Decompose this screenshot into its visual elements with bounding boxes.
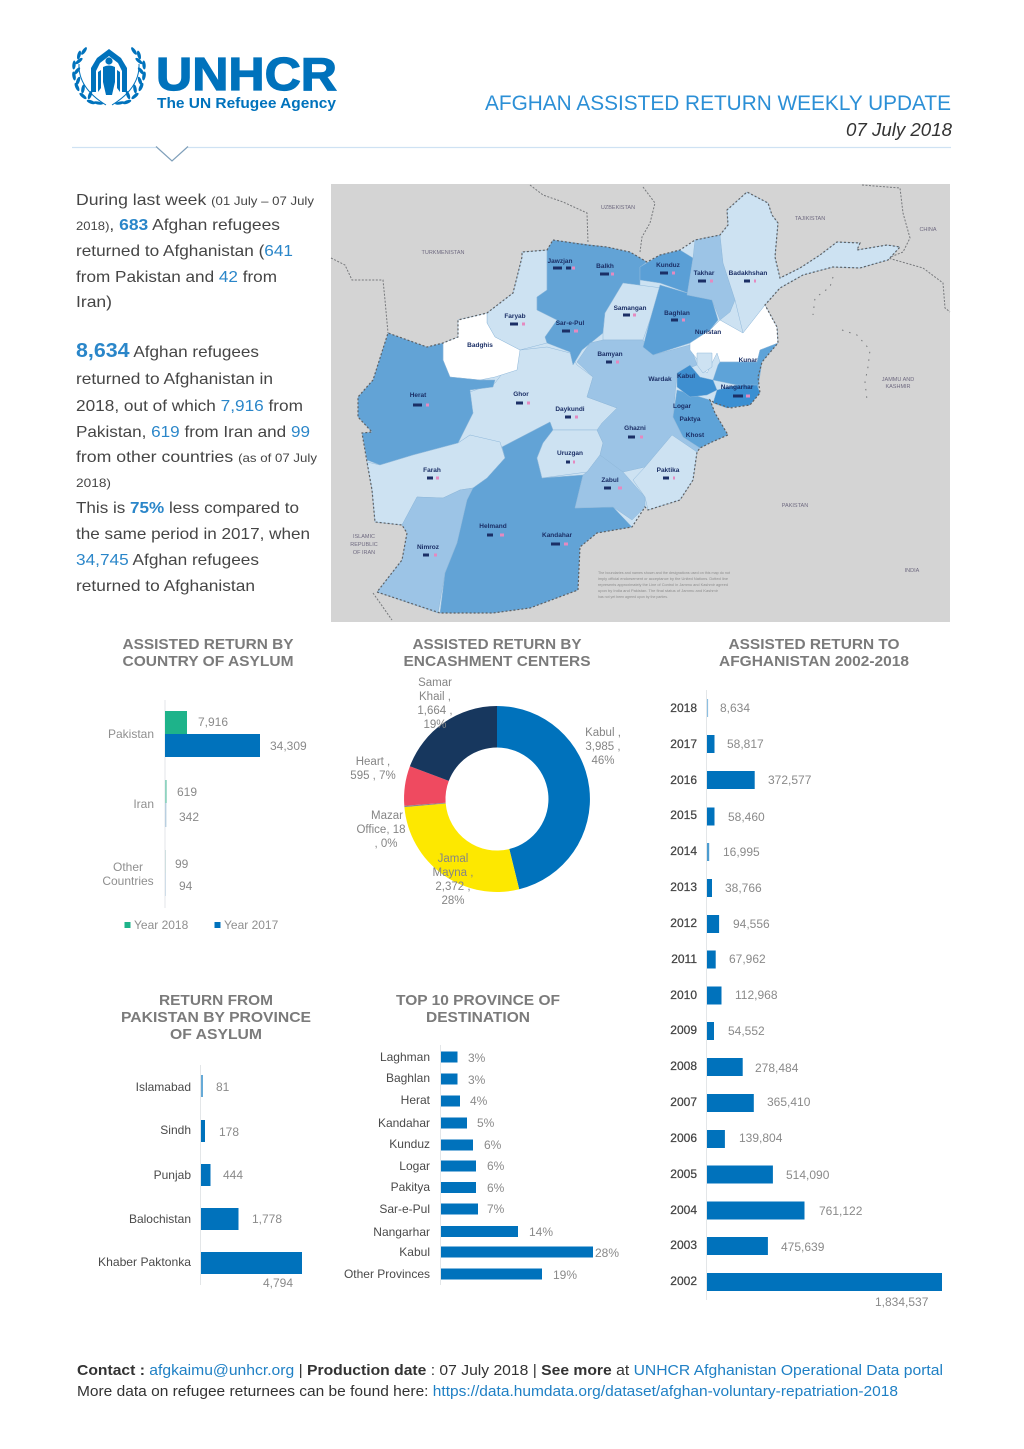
bar chart: 2016 (670, 773, 697, 787)
bar chart: 3% (468, 1073, 486, 1087)
bar chart: 619 (177, 785, 197, 799)
province labels: Kunduz (656, 262, 681, 269)
donut labels: Mayna , (433, 867, 473, 879)
neighbouring country labels: CHINA (919, 227, 937, 233)
text block: weekly summary: the same period in 2017, when (76, 526, 310, 543)
bar chart: 2012 (670, 916, 697, 930)
province labels: Zabul (601, 477, 619, 484)
province labels: Nangarhar (721, 384, 754, 391)
province labels: Kabul (677, 373, 695, 380)
heading: ASSISTED RETURN TO (728, 636, 900, 653)
neighbouring country labels: PAKISTAN (782, 503, 808, 509)
province labels: Takhar (694, 270, 715, 277)
bar chart: 58,817 (727, 737, 764, 751)
text block: weekly summary: returned to Afghanistan in (76, 371, 273, 388)
bar chart: 4,794 (263, 1276, 293, 1290)
bar chart: Pakistan (108, 727, 154, 741)
footer: contact and links: Contact : afgkaimu@unhcr.org | Production date : 07 July 2018 | See more at UNHCR Afghanistan Operational Data portal (77, 1362, 943, 1379)
province labels: Paktika (657, 467, 680, 474)
bar chart: 58,460 (728, 810, 765, 824)
bar chart: Khaber Paktonka (98, 1255, 191, 1269)
footer: contact and links: More data on refugee returnees can be found here: https://data.humdata.org/dataset/afghan-voluntary-repatriation-2018 (77, 1383, 898, 1400)
donut labels: 28% (441, 895, 465, 907)
panel: top 10 province of destination (344, 992, 619, 1285)
bar chart (670, 690, 942, 1309)
date: 07 July 2018 (846, 120, 952, 140)
heading: COUNTRY OF ASYLUM (122, 653, 294, 670)
bar chart: Countries (102, 874, 154, 888)
map disclaimer: represents approximately the Line of Control in Jammu and Kashmir agreed (598, 583, 728, 587)
province labels: Nimroz (417, 544, 440, 551)
legend: Year 2017 (224, 918, 279, 932)
text block: weekly summary: from other countries (as of 07 July (76, 449, 317, 466)
donut labels: Kabul , (585, 727, 621, 739)
bar chart: 14% (529, 1225, 553, 1239)
text block: weekly summary: returned to Afghanistan (76, 578, 255, 595)
province labels: Herat (410, 392, 427, 399)
bar chart: Balochistan (129, 1212, 191, 1226)
donut labels: 2,372 , (435, 881, 471, 893)
donut labels: Khail , (419, 691, 451, 703)
title: AFGHAN ASSISTED RETURN WEEKLY UPDATE (485, 92, 951, 115)
province labels: Khost (686, 432, 705, 439)
footer: contact and links (77, 1362, 943, 1400)
bar chart: 139,804 (739, 1131, 783, 1145)
neighbouring country labels: INDIA (905, 568, 920, 574)
bar chart: 2010 (670, 988, 697, 1002)
bar chart (344, 1045, 619, 1285)
bar chart: 94 (179, 879, 193, 893)
bar chart: 7% (487, 1202, 505, 1216)
heading: ASSISTED RETURN BY (412, 636, 582, 653)
text block: weekly summary: 2018), 683 Afghan refugees (76, 217, 280, 234)
donut labels: 595 , 7% (350, 770, 396, 782)
bar chart: 28% (595, 1246, 619, 1260)
bar chart: Other Provinces (344, 1267, 430, 1281)
bar chart: 2008 (670, 1059, 697, 1073)
heading (122, 636, 294, 670)
neighbouring country labels: TURKMENISTAN (422, 250, 465, 256)
text block: weekly summary: returned to Afghanistan ( 641 (76, 243, 293, 260)
bar chart: Iran (133, 797, 154, 811)
neighbouring country labels: JAMMU AND (882, 377, 914, 383)
heading: DESTINATION (426, 1009, 530, 1026)
donut labels: Mazar (371, 810, 403, 822)
neighbouring country labels: TAJIKISTAN (795, 216, 825, 222)
heading: PAKISTAN BY PROVINCE (121, 1009, 311, 1026)
bar chart: 2007 (670, 1095, 697, 1109)
donut labels: 1,664 , (417, 705, 453, 717)
bar chart: Punjab (154, 1168, 191, 1182)
bar chart: 2018 (670, 701, 697, 715)
text block: weekly summary: from Pakistan and 42 from (76, 269, 277, 286)
donut labels: 3,985 , (585, 741, 621, 753)
text block: weekly summary (76, 192, 317, 595)
province labels (410, 258, 767, 551)
province labels: Wardak (648, 376, 672, 383)
donut labels: 19% (423, 719, 447, 731)
bar chart: 2002 (670, 1274, 697, 1288)
bar chart: 475,639 (781, 1240, 825, 1254)
province labels: Helmand (479, 523, 507, 530)
province labels: Baghlan (664, 310, 690, 317)
bar chart: 6% (487, 1181, 505, 1195)
province labels: Sar-e-Pul (556, 320, 584, 327)
bar chart: 2004 (670, 1203, 697, 1217)
province labels: Badakhshan (729, 270, 767, 277)
bar chart: 1,778 (252, 1212, 282, 1226)
text block: weekly summary: During last week (01 July – 07 July (76, 192, 314, 209)
heading: TOP 10 PROVINCE OF (396, 992, 560, 1009)
bar chart: 2003 (670, 1238, 697, 1252)
map disclaimer: The boundaries and names shown and the designations used on this map do not (598, 571, 730, 575)
province labels: Samangan (614, 305, 646, 312)
bar chart: 2017 (670, 737, 697, 751)
bar chart: 38,766 (725, 881, 762, 895)
bar chart: Nangarhar (373, 1225, 430, 1239)
panel: assisted return to Afghanistan 2002-2018 (670, 636, 942, 1309)
bar chart: Pakitya (391, 1180, 430, 1194)
bar chart: 2014 (670, 844, 697, 858)
neighbouring country labels: OF IRAN (353, 550, 375, 556)
bar chart (98, 1065, 302, 1290)
donut labels: Jamal (438, 853, 468, 865)
bar chart: 5% (477, 1116, 495, 1130)
bar chart: 1,834,537 (875, 1295, 929, 1309)
panel: map of Afghanistan (331, 184, 950, 622)
bar chart: Kabul (399, 1245, 430, 1259)
map background (331, 184, 950, 622)
bar chart: 54,552 (728, 1024, 765, 1038)
bar chart: 342 (179, 810, 199, 824)
province labels: Nuristan (695, 329, 721, 336)
neighbouring country borders (331, 185, 950, 620)
donut labels: Samar (418, 677, 452, 689)
province labels: Badghis (467, 342, 493, 349)
bar chart: 8,634 (720, 701, 750, 715)
heading (121, 992, 311, 1043)
panel: return from Pakistan by province of asylum (98, 992, 311, 1290)
map disclaimer (598, 571, 730, 599)
bar chart: 2015 (670, 808, 697, 822)
heading: OF ASYLUM (170, 1026, 262, 1043)
bar chart: 365,410 (767, 1095, 811, 1109)
panel: assisted return by encashment centers (350, 636, 621, 907)
header rule with chevron (72, 146, 951, 161)
province labels: Daykundi (555, 406, 585, 413)
province labels: Faryab (504, 313, 526, 320)
province labels: Farah (423, 467, 441, 474)
province labels: Uruzgan (557, 450, 583, 457)
heading (404, 636, 590, 670)
bar chart: 2011 (671, 952, 697, 966)
bar chart: 444 (223, 1168, 243, 1182)
bar chart: 2005 (670, 1167, 697, 1181)
bar chart: 278,484 (755, 1061, 799, 1075)
logo tagline: The UN Refugee Agency (157, 95, 337, 112)
bar chart: Islamabad (136, 1080, 191, 1094)
bar chart: 6% (484, 1138, 502, 1152)
bar chart: 372,577 (768, 773, 812, 787)
Afghanistan border (358, 192, 900, 613)
province labels: Balkh (596, 263, 614, 270)
text block: weekly summary: Pakistan, 619 from Iran and 99 (76, 424, 310, 441)
province labels: Paktya (680, 416, 701, 423)
donut labels: Heart , (356, 756, 390, 768)
bar chart: Herat (401, 1093, 431, 1107)
neighbouring country labels: ISLAMIC (353, 534, 375, 540)
heading: ASSISTED RETURN BY (122, 636, 294, 653)
neighbouring country labels (350, 205, 937, 574)
neighbouring country labels: REPUBLIC (350, 542, 378, 548)
legend: Year 2018 (134, 918, 189, 932)
bar chart: 514,090 (786, 1168, 830, 1182)
bar chart: 99 (175, 857, 189, 871)
text block: weekly summary: 2018) (76, 476, 111, 490)
text block: weekly summary: 2018, out of which 7,916 from (76, 398, 303, 415)
province labels: Kunar (739, 357, 758, 364)
text block: weekly summary: 34,745 Afghan refugees (76, 552, 259, 569)
legend (124, 918, 279, 932)
bar chart: Kandahar (378, 1116, 430, 1130)
panel: assisted return by country of asylum (102, 636, 307, 932)
text block: weekly summary: 8,634 Afghan refugees (76, 340, 259, 362)
bar chart: 67,962 (729, 952, 766, 966)
bar chart: Baghlan (386, 1071, 430, 1085)
bar chart: Kunduz (389, 1137, 430, 1151)
bar chart: 761,122 (819, 1204, 863, 1218)
provinces (358, 192, 900, 613)
bar chart: 19% (553, 1268, 577, 1282)
bar chart: Laghman (380, 1050, 430, 1064)
bar chart (102, 700, 307, 908)
logo wordmark: UNHCR (156, 48, 337, 100)
heading: AFGHANISTAN 2002-2018 (719, 653, 909, 670)
bar chart: 34,309 (270, 739, 307, 753)
icon: UNHCR emblem (72, 46, 146, 105)
bar chart: 112,968 (735, 988, 778, 1002)
text block: weekly summary: Iran) (76, 294, 112, 311)
bar chart: 3% (468, 1051, 486, 1065)
bar chart: Other (113, 860, 143, 874)
map disclaimer: has not yet been agreed upon by the parties. (598, 595, 668, 599)
bar chart: 178 (219, 1125, 239, 1139)
bar chart: Sindh (160, 1123, 191, 1137)
map disclaimer: upon by India and Pakistan. The final status of Jammu and Kashmir (598, 589, 719, 593)
donut labels (350, 677, 621, 907)
heading (719, 636, 909, 670)
map disclaimer: imply official endorsement or acceptance by the United Nations. Dotted line (598, 577, 728, 581)
heading: ENCASHMENT CENTERS (404, 653, 590, 670)
province value marks (413, 268, 756, 555)
bar chart: 2013 (670, 880, 697, 894)
bar chart: 6% (487, 1159, 505, 1173)
bar chart: Logar (399, 1159, 430, 1173)
heading (396, 992, 560, 1026)
bar chart: 2006 (670, 1131, 697, 1145)
donut chart (404, 706, 590, 892)
bar chart: 16,995 (723, 845, 760, 859)
province labels: Jawzjan (548, 258, 572, 265)
bar chart: 2009 (670, 1023, 697, 1037)
donut labels: , 0% (374, 838, 398, 850)
Afghanistan base shape (358, 192, 900, 613)
province labels: Ghor (513, 391, 529, 398)
bar chart: 4% (470, 1094, 488, 1108)
province labels: Bamyan (597, 351, 623, 358)
neighbouring country labels: KASHMIR (885, 384, 911, 390)
logo: UNHCR (72, 46, 337, 112)
donut labels: 46% (591, 755, 615, 767)
heading: RETURN FROM (159, 992, 273, 1009)
province labels: Ghazni (624, 425, 646, 432)
bar chart: 81 (216, 1080, 230, 1094)
neighbouring country labels: UZBEKISTAN (601, 205, 635, 211)
bar chart: 7,916 (198, 715, 228, 729)
province labels: Logar (673, 403, 691, 410)
province labels: Kandahar (542, 532, 572, 539)
donut labels: Office, 18 (356, 824, 406, 836)
text block: weekly summary: This is 75% less compared to (76, 500, 299, 517)
bar chart: 94,556 (733, 917, 770, 931)
bar chart: Sar-e-Pul (379, 1202, 430, 1216)
